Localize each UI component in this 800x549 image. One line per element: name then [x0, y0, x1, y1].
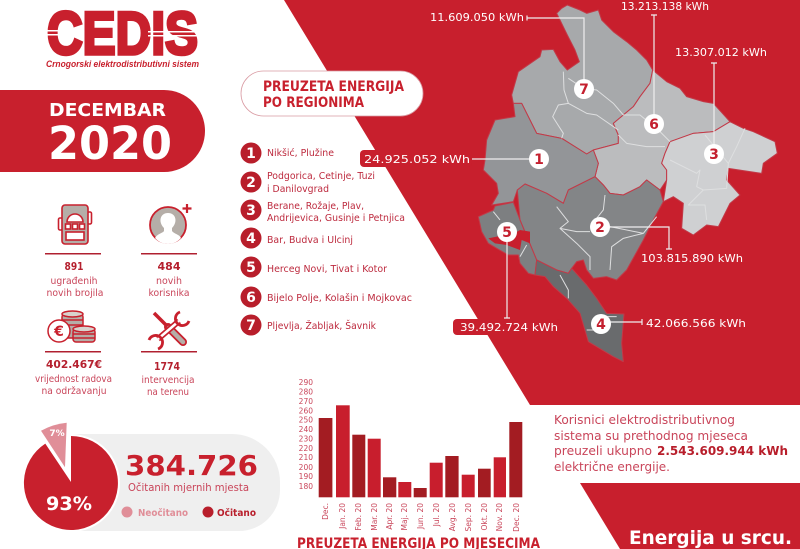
y axis labels: [299, 378, 313, 491]
callout: region 6: 6: [649, 117, 659, 133]
bar chart: monthly energy: [299, 378, 522, 532]
stat: new meters: novih brojila: [46, 288, 104, 299]
y axis labels: 190: [299, 472, 313, 481]
region legend list: Berane, Rožaje, Plav,: [267, 200, 364, 212]
map of Montenegro regions: [478, 5, 777, 362]
stat: field interventions: [141, 312, 197, 398]
month labels: Nov. 20: [495, 503, 504, 531]
legend: Očitano: [217, 507, 256, 519]
y axis labels: 280: [299, 388, 313, 396]
date banner: 2020: [48, 117, 172, 170]
bars: [319, 405, 522, 497]
callout: region 3: [675, 46, 767, 164]
y axis labels: 200: [299, 463, 313, 472]
callout: region 3: 13.307.012 kWh: [675, 46, 767, 59]
logo: Crnogorski elektrodistributivni sistem: [46, 59, 199, 69]
region legend list: Pljevlja, Žabljak, Šavnik: [267, 319, 376, 332]
region legend list: Podgorica, Cetinje, Tuzi: [267, 171, 375, 182]
stat: field interventions: intervencija: [142, 375, 194, 386]
panel: regions heading pill: [241, 71, 423, 116]
y axis labels: 220: [299, 444, 313, 453]
callout: region 2: 103.815.890 kWh: [641, 252, 743, 265]
region legend list: Bar, Budva i Ulcinj: [267, 235, 353, 246]
month labels: Avg. 20: [448, 503, 457, 531]
month labels: Jun. 20: [416, 503, 425, 530]
region 2 shape: [517, 177, 663, 280]
callout: region 7: 11.609.050 kWh: [430, 11, 524, 24]
text block: total energy: [554, 412, 788, 474]
month labels: Jan. 20: [338, 503, 347, 530]
text block: total energy: Korisnici elektrodistributivnog: [554, 412, 735, 427]
stat: field interventions: 1774: [154, 360, 180, 373]
panel: read meters: [22, 423, 280, 532]
panel: read meters: Očitanih mjernih mjesta: [128, 482, 249, 494]
date banner: DECEMBAR: [49, 100, 166, 121]
month labels: [321, 503, 521, 532]
region legend list: 3: [246, 203, 256, 219]
background: red footer panel: [580, 483, 800, 549]
text block: total energy: sistema su prethodnog mjeseca: [554, 428, 748, 443]
pie chart: 93%: [46, 493, 92, 515]
date banner: [0, 90, 205, 172]
stat: maintenance value: [35, 311, 112, 397]
y axis labels: 290: [299, 378, 313, 387]
stat: new users: [141, 204, 197, 299]
icon: wrench and screwdriver: [149, 312, 189, 349]
region legend list: 1: [246, 146, 256, 162]
month labels: Dec. 20: [512, 503, 521, 532]
y axis labels: 180: [299, 482, 313, 491]
callout: region 2: 2: [595, 220, 605, 236]
panel: read meters: 384.726: [125, 449, 258, 482]
region legend list: i Danilovgrad: [267, 184, 329, 195]
callout: region 1: 1: [534, 152, 544, 168]
panel: regions heading pill: PO REGIONIMA: [263, 95, 364, 111]
region legend list: Nikšić, Plužine: [267, 147, 334, 159]
y axis labels: 230: [299, 434, 313, 444]
callout: region 5: 39.492.724 kWh: [460, 321, 558, 334]
callout: region 5: 5: [502, 225, 512, 241]
region 7 shape: [512, 5, 653, 154]
y axis labels: 240: [299, 425, 313, 434]
stat: new meters: 891: [64, 260, 84, 273]
text block: total energy: 2.543.609.944 kWh: [657, 443, 788, 458]
region 6 shape: [593, 70, 730, 195]
callout: region 2: [590, 217, 743, 265]
region legend list: 4: [246, 231, 256, 247]
callout: region 7: 7: [579, 82, 589, 98]
region 3 shape: [662, 122, 777, 235]
stat: maintenance value: na održavanju: [42, 385, 106, 397]
logo: CEDIS: [47, 0, 198, 67]
region 5 Kotor bay: [488, 230, 530, 250]
text block: total energy: preuzeli ukupno: [554, 443, 652, 458]
region legend list: Herceg Novi, Tivat i Kotor: [267, 264, 388, 275]
region legend list: 2: [246, 175, 256, 191]
month labels: Sep. 20: [464, 503, 473, 531]
region legend list: Bijelo Polje, Kolašin i Mojkovac: [267, 292, 412, 304]
region 5 shape: [478, 202, 537, 275]
region 1 shape: [483, 103, 598, 205]
panel: regions heading pill: PREUZETA ENERGIJA: [263, 79, 404, 95]
region legend list: Andrijevica, Gusinje i Petnjica: [267, 213, 405, 224]
y axis labels: 260: [299, 406, 313, 416]
month labels: Okt. 20: [480, 503, 489, 530]
slogan: Energija u srcu.: [629, 527, 792, 549]
region legend list: [240, 142, 412, 336]
region legend list: 6: [246, 290, 256, 306]
callout: region 1: [360, 149, 549, 169]
y axis labels: 270: [299, 397, 313, 406]
icon: electric meter: [58, 205, 92, 244]
callout: region 4: [591, 314, 746, 334]
pie chart: [22, 423, 120, 532]
stat: maintenance value: vrijednost radova: [35, 374, 112, 385]
icon: user with plus: [150, 204, 192, 244]
month labels: Maj. 20: [400, 503, 409, 530]
callout: region 6: [621, 0, 709, 134]
callout: region 5: [453, 222, 561, 335]
stat: new meters: ugrađenih: [50, 276, 98, 287]
month labels: Mar. 20: [370, 503, 379, 531]
callout: region 1: 24.925.052 kWh: [364, 153, 470, 166]
legend: Neočitano: [138, 507, 188, 519]
stat: new users: 484: [158, 260, 181, 273]
y axis labels: 250: [299, 416, 313, 424]
callout: region 3: 3: [709, 147, 719, 163]
pie chart: 7%: [49, 429, 65, 439]
stat: field interventions: na terenu: [147, 387, 189, 398]
region 4 shape: [535, 260, 624, 362]
y axis labels: 210: [299, 453, 313, 462]
callout: region 4: 42.066.566 kWh: [646, 317, 746, 330]
callout: region 7: [430, 11, 594, 99]
region legend list: 7: [246, 318, 256, 334]
month labels: Dec.: [321, 503, 330, 520]
stat: maintenance value: 402.467€: [46, 359, 102, 371]
callout: region 4: 4: [596, 317, 606, 333]
text block: total energy: električne energije.: [554, 459, 670, 474]
icon: euro coins: €: [53, 324, 64, 340]
legend: [122, 506, 256, 519]
month labels: Apr. 20: [385, 503, 394, 530]
stat: new users: korisnika: [148, 288, 190, 299]
month labels: Feb. 20: [354, 503, 363, 531]
stat: new users: novih: [156, 276, 182, 287]
month labels: Jul. 20: [432, 503, 441, 527]
background: red diagonal panel: [284, 0, 800, 405]
region legend list: 5: [246, 260, 256, 276]
stat: new meters: [45, 205, 104, 299]
municipal borders: [493, 72, 745, 330]
callout: region 6: 13.213.138 kWh: [621, 0, 709, 13]
